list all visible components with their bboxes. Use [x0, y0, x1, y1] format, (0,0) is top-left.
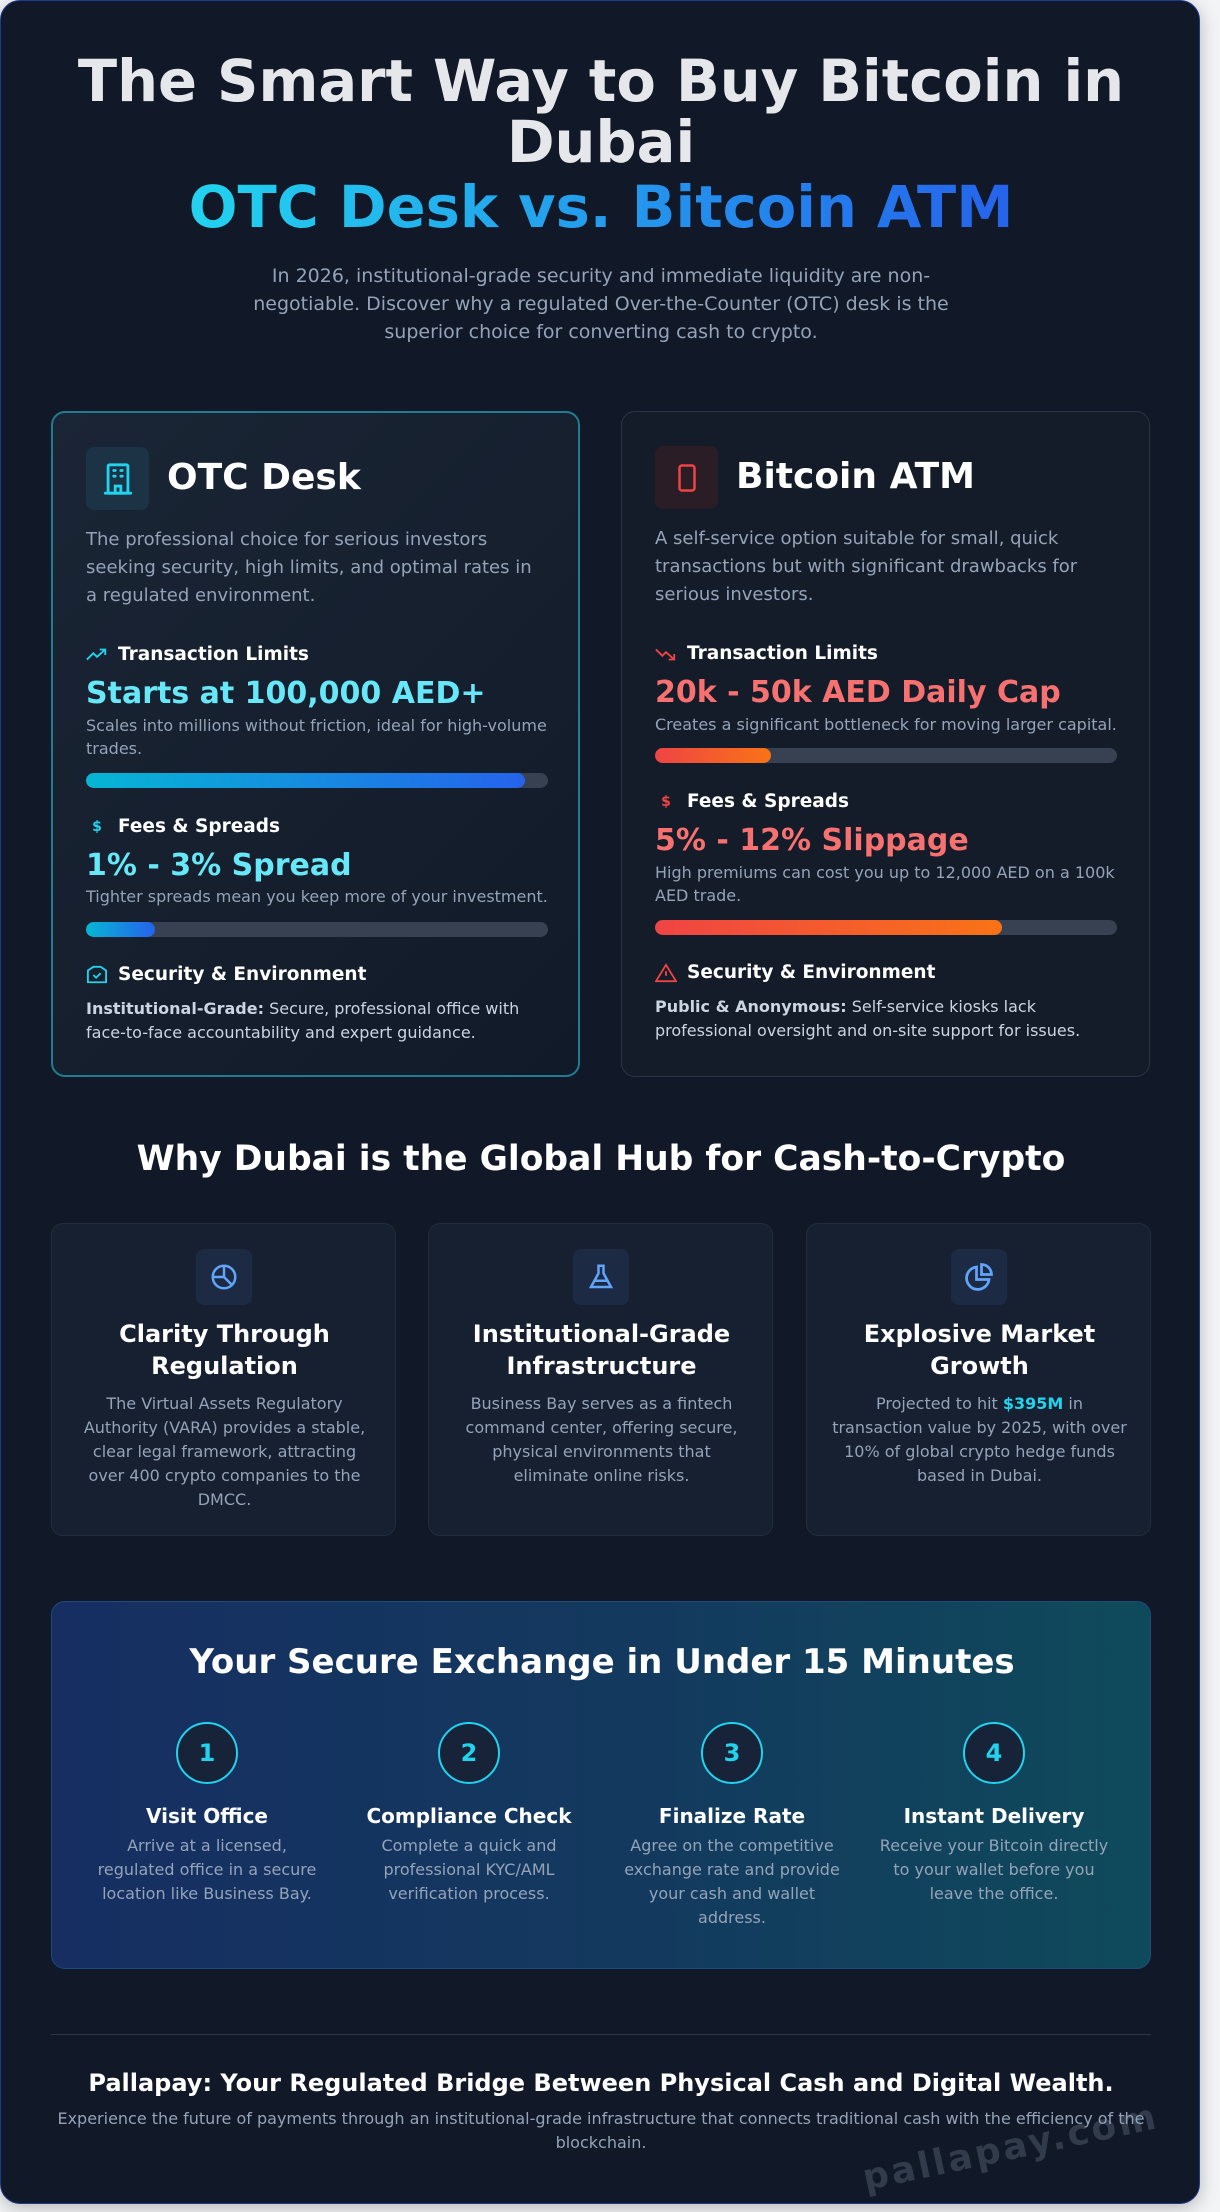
- fees label: $: [92, 818, 102, 834]
- watermark: pallapay.com: [859, 2096, 1162, 2199]
- heading: OTC Desk: [167, 457, 361, 498]
- fees label: Fees & Spreads: [118, 816, 280, 837]
- panel: infrastructure: Business Bay serves as a fintech command center, offering secure, physical environments that eliminate online risks.: [466, 1394, 737, 1485]
- icon: pie chart: [951, 1249, 1007, 1305]
- security label: Security & Environment: [118, 964, 366, 985]
- transaction limits label: Transaction Limits: [687, 643, 878, 664]
- title: [78, 48, 1124, 241]
- step 2: Complete a quick and professional KYC/AML verification process.: [381, 1836, 557, 1903]
- step 3: [624, 1722, 840, 1927]
- step 3: Finalize Rate: [659, 1804, 805, 1828]
- panel: OTC Desk: Tighter spreads mean you keep more of your investment.: [86, 887, 548, 906]
- step 4: Receive your Bitcoin directly to your wallet before you leave the office.: [880, 1836, 1108, 1903]
- panel: OTC Desk: Scales into millions without friction, ideal for high-volume trades.: [86, 716, 547, 758]
- bar: limits: [86, 773, 548, 788]
- bar: limits: [655, 748, 1117, 763]
- panel: Bitcoin ATM: High premiums can cost you up to 12,000 AED on a 100k AED trade.: [655, 863, 1115, 905]
- panel: OTC Desk: [51, 411, 580, 1077]
- description: The professional choice for serious investors seeking security, high limits, and optimal rates in a regulated environment.: [86, 529, 532, 606]
- steps heading: Your Secure Exchange in Under 15 Minutes: [189, 1642, 1015, 1682]
- panel: growth: Projected to hit $395M in transaction value by 2025, with over 10% of global crypto hedge funds based in Dubai.: [832, 1394, 1127, 1485]
- step 2: [366, 1722, 572, 1903]
- security text: Institutional-Grade: Secure, professional office with face-to-face accountability and expert guidance.: [86, 999, 519, 1042]
- panel: growth: Explosive Market Growth: [864, 1320, 1095, 1380]
- step 3: 3: [724, 1739, 740, 1767]
- panel: regulation: The Virtual Assets Regulatory Authority (VARA) provides a stable, clear legal framework, attracting over 400 crypto companies to the DMCC.: [84, 1394, 365, 1509]
- step 4: Instant Delivery: [904, 1804, 1084, 1828]
- fees label: Fees & Spreads: [687, 791, 849, 812]
- footer heading: Pallapay: Your Regulated Bridge Between Physical Cash and Digital Wealth.: [88, 2069, 1114, 2097]
- security text: Public & Anonymous: Self-service kiosks lack professional oversight and on-site support for issues.: [655, 997, 1080, 1040]
- icon: pie: [196, 1249, 252, 1305]
- heading: Bitcoin ATM: [736, 456, 975, 497]
- panel: Bitcoin ATM: [621, 411, 1150, 1077]
- footer text: Experience the future of payments through an institutional-grade infrastructure that connects traditional cash with the efficiency of the blockchain.: [57, 2109, 1145, 2152]
- panel: regulation: Clarity Through Regulation: [119, 1320, 330, 1380]
- panel: steps: [51, 1601, 1151, 1969]
- title: Dubai: [507, 109, 695, 176]
- bar: fees: [655, 920, 1117, 935]
- step 1: Visit Office: [146, 1804, 268, 1828]
- step 1: Arrive at a licensed, regulated office in a secure location like Business Bay.: [98, 1836, 316, 1903]
- panel: infrastructure: [428, 1223, 773, 1536]
- panel: infrastructure: Institutional-Grade Infrastructure: [473, 1320, 730, 1380]
- step 4: [880, 1722, 1108, 1903]
- security label: Security & Environment: [687, 962, 935, 983]
- panel: growth: [806, 1223, 1151, 1536]
- title: The Smart Way to Buy Bitcoin in: [78, 48, 1124, 115]
- step 1: [98, 1722, 316, 1903]
- value: 20k - 50k AED Daily Cap: [655, 675, 1061, 710]
- icon: phone: [655, 446, 718, 509]
- panel: Bitcoin ATM: Creates a significant bottleneck for moving larger capital.: [655, 715, 1117, 734]
- step 2: Compliance Check: [366, 1804, 572, 1828]
- icon: building: [86, 447, 149, 510]
- subtitle: In 2026, institutional-grade security and immediate liquidity are non-negotiable. Discover why a regulated Over-the-Counter (OTC) desk is the superior choice for converting cash to crypto.: [253, 265, 949, 343]
- description: A self-service option suitable for small, quick transactions but with significant drawbacks for serious investors.: [655, 528, 1077, 605]
- fees label: $: [661, 794, 671, 810]
- step 1: 1: [199, 1739, 215, 1767]
- icon: flask: [573, 1249, 629, 1305]
- transaction limits label: Transaction Limits: [118, 644, 309, 665]
- bar: fees: [86, 922, 548, 937]
- heading: why Dubai: Why Dubai is the Global Hub for Cash-to-Crypto: [137, 1139, 1065, 1179]
- step 2: 2: [461, 1739, 477, 1767]
- title: OTC Desk vs. Bitcoin ATM: [189, 174, 1013, 241]
- fees value: 5% - 12% Slippage: [655, 823, 969, 858]
- fees value: 1% - 3% Spread: [86, 848, 352, 883]
- panel: regulation: [51, 1223, 396, 1536]
- step 3: Agree on the competitive exchange rate and provide your cash and wallet address.: [624, 1836, 840, 1927]
- value: Starts at 100,000 AED+: [86, 676, 486, 711]
- step 4: 4: [986, 1739, 1002, 1767]
